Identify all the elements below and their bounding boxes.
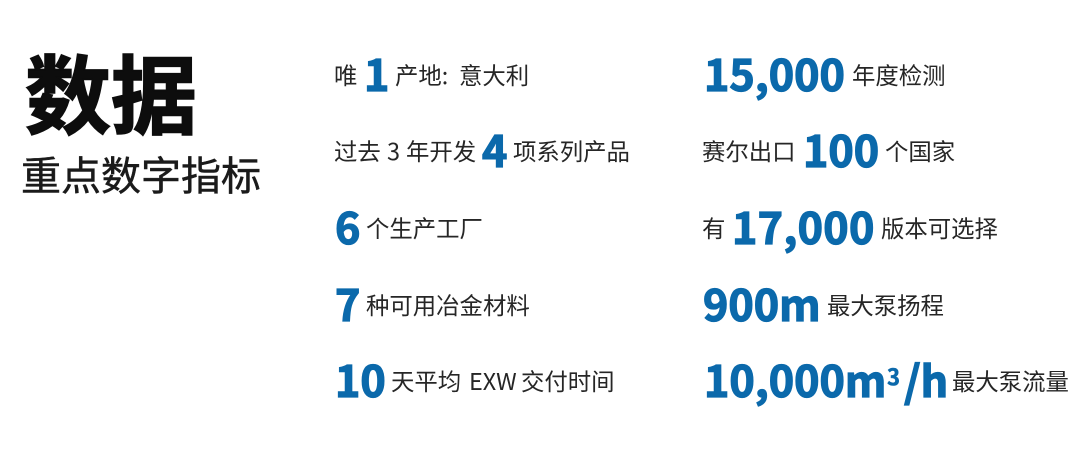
stat: product series: 过去 bbox=[334, 133, 381, 167]
stat: delivery days: 10 bbox=[335, 348, 386, 410]
stat: sole origin: 唯 bbox=[334, 57, 357, 91]
stat: max flow bbox=[704, 348, 1069, 410]
stat: yearly tests: 年度检测 bbox=[852, 57, 946, 91]
stat: metallurgies: 种可用冶金材料 bbox=[366, 287, 530, 321]
stat: sole origin: 1 bbox=[364, 42, 389, 104]
stat: delivery days bbox=[335, 348, 615, 410]
stat: product series bbox=[334, 118, 630, 180]
stat: metallurgies: 7 bbox=[335, 272, 360, 334]
stat: factories: 6 bbox=[335, 195, 360, 257]
stat: max flow: /h bbox=[904, 348, 948, 410]
stat: max flow: 10,000m bbox=[704, 348, 886, 410]
stat: product series: 4 bbox=[482, 118, 507, 180]
stat: factories bbox=[335, 195, 483, 257]
stat: versions: 17,000 bbox=[732, 195, 875, 257]
stat: export countries: 100 bbox=[803, 118, 879, 180]
stat: factories: 个生产工厂 bbox=[366, 210, 483, 244]
stat: yearly tests bbox=[704, 42, 946, 104]
stat: product series: 年开发 bbox=[406, 133, 476, 167]
stat: product series: 3 bbox=[387, 133, 400, 167]
stat: delivery days: 交付时间 bbox=[521, 363, 615, 397]
stat: max head: 900m bbox=[703, 272, 821, 334]
stat: export countries: 赛尔出口 bbox=[702, 133, 796, 167]
stat: sole origin: 产地: bbox=[395, 57, 448, 91]
stat: export countries bbox=[702, 118, 955, 180]
stat: max head bbox=[703, 272, 944, 334]
stat: sole origin bbox=[334, 42, 529, 104]
stat: max head: 最大泵扬程 bbox=[827, 287, 944, 321]
stat: versions: 有 bbox=[702, 210, 725, 244]
title: 数据 bbox=[25, 27, 197, 152]
stat: versions: 版本可选择 bbox=[881, 210, 998, 244]
stat: export countries: 个国家 bbox=[885, 133, 955, 167]
stat: max flow: 最大泵流量 bbox=[952, 363, 1069, 397]
stat: metallurgies bbox=[335, 272, 530, 334]
stat: delivery days: EXW bbox=[469, 363, 517, 397]
stat: product series: 项系列产品 bbox=[513, 133, 630, 167]
stat: versions bbox=[702, 195, 998, 257]
stat: sole origin: 意大利 bbox=[459, 57, 529, 91]
stat: max flow: 3 bbox=[887, 360, 900, 392]
stat: yearly tests: 15,000 bbox=[704, 42, 845, 104]
subtitle: 重点数字指标 bbox=[21, 144, 261, 202]
stat: delivery days: 天平均 bbox=[391, 363, 461, 397]
